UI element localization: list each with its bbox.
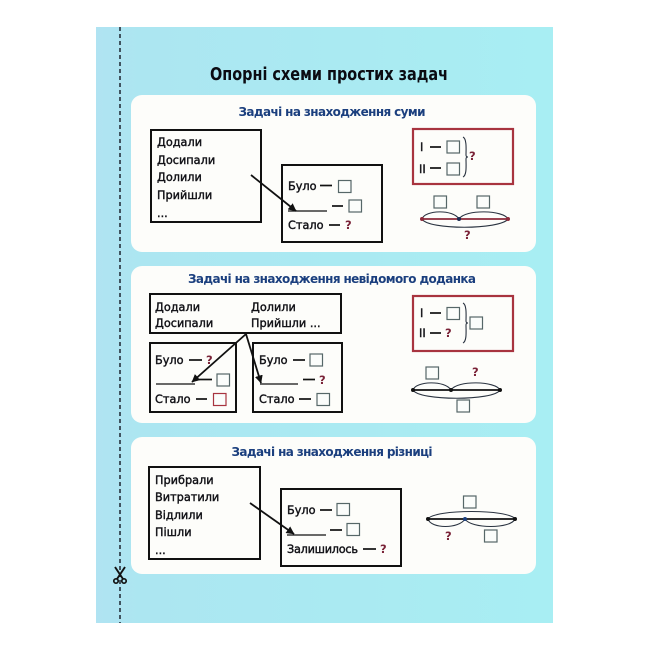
word list box: Додали bbox=[157, 136, 202, 149]
arrow bbox=[251, 175, 296, 211]
word list box bbox=[149, 467, 260, 559]
panel: unknown addend tasks bbox=[131, 266, 536, 423]
word list box bbox=[150, 294, 341, 333]
segment diagram: ? bbox=[464, 228, 471, 242]
left record box: ? bbox=[206, 353, 213, 367]
cut line bbox=[119, 27, 121, 623]
segment diagram: ? bbox=[472, 365, 479, 379]
short record box: Було bbox=[287, 504, 316, 517]
icon: scissors bbox=[114, 567, 126, 583]
short record box bbox=[282, 165, 382, 242]
red scheme box: ? bbox=[469, 149, 476, 163]
segment diagram bbox=[426, 496, 517, 543]
panel: difference tasks bbox=[131, 437, 536, 574]
word list box: Досипали bbox=[157, 154, 215, 167]
heading: addend: Задачі на знаходження невідомого доданка bbox=[188, 272, 476, 286]
red scheme box: II bbox=[419, 163, 426, 176]
word list box: Прийшли bbox=[157, 189, 212, 202]
red scheme box: ? bbox=[445, 326, 452, 340]
word list box bbox=[151, 130, 261, 222]
short record box: Залишилось bbox=[287, 543, 358, 556]
right record box: Стало bbox=[259, 393, 295, 406]
heading: difference: Задачі на знаходження різниці bbox=[232, 445, 432, 459]
red scheme box bbox=[413, 296, 513, 351]
word list box: ... bbox=[157, 207, 168, 220]
arrow left bbox=[192, 334, 246, 382]
heading: sum: Задачі на знаходження суми bbox=[238, 105, 426, 119]
short record box: Було bbox=[288, 180, 317, 193]
word list box: Витратили bbox=[155, 491, 219, 504]
word list box: Прийшли ... bbox=[251, 317, 321, 330]
red scheme box: I bbox=[420, 141, 423, 154]
left record box: Стало bbox=[155, 393, 191, 406]
red scheme box: I bbox=[420, 307, 423, 320]
short record box: ? bbox=[380, 542, 387, 556]
arrow right bbox=[246, 334, 261, 383]
right record box: Було bbox=[259, 354, 288, 367]
word list box: Пішли bbox=[155, 526, 192, 539]
segment diagram bbox=[420, 196, 510, 242]
red scheme box: II bbox=[419, 327, 426, 340]
short record box: Стало bbox=[288, 219, 324, 232]
word list box: Досипали bbox=[155, 317, 213, 330]
word list box: Додали bbox=[155, 301, 200, 314]
segment diagram bbox=[411, 365, 502, 412]
background page bbox=[96, 27, 553, 623]
word list box: Відлили bbox=[155, 509, 203, 522]
segment diagram: ? bbox=[445, 529, 452, 543]
title: Опорні схеми простих задач bbox=[210, 64, 448, 85]
left record box bbox=[150, 343, 236, 412]
word list box: ... bbox=[155, 544, 166, 557]
right record box: ? bbox=[319, 373, 326, 387]
word list box: Долили bbox=[157, 171, 202, 184]
word list box: Долили bbox=[251, 301, 296, 314]
arrow bbox=[250, 503, 294, 534]
right record box bbox=[253, 343, 342, 412]
short record box: ? bbox=[345, 218, 352, 232]
short record box bbox=[281, 489, 401, 566]
left record box: Було bbox=[155, 354, 184, 367]
panel: sum tasks bbox=[131, 95, 536, 252]
word list box: Прибрали bbox=[155, 474, 214, 487]
red scheme box bbox=[413, 129, 513, 184]
